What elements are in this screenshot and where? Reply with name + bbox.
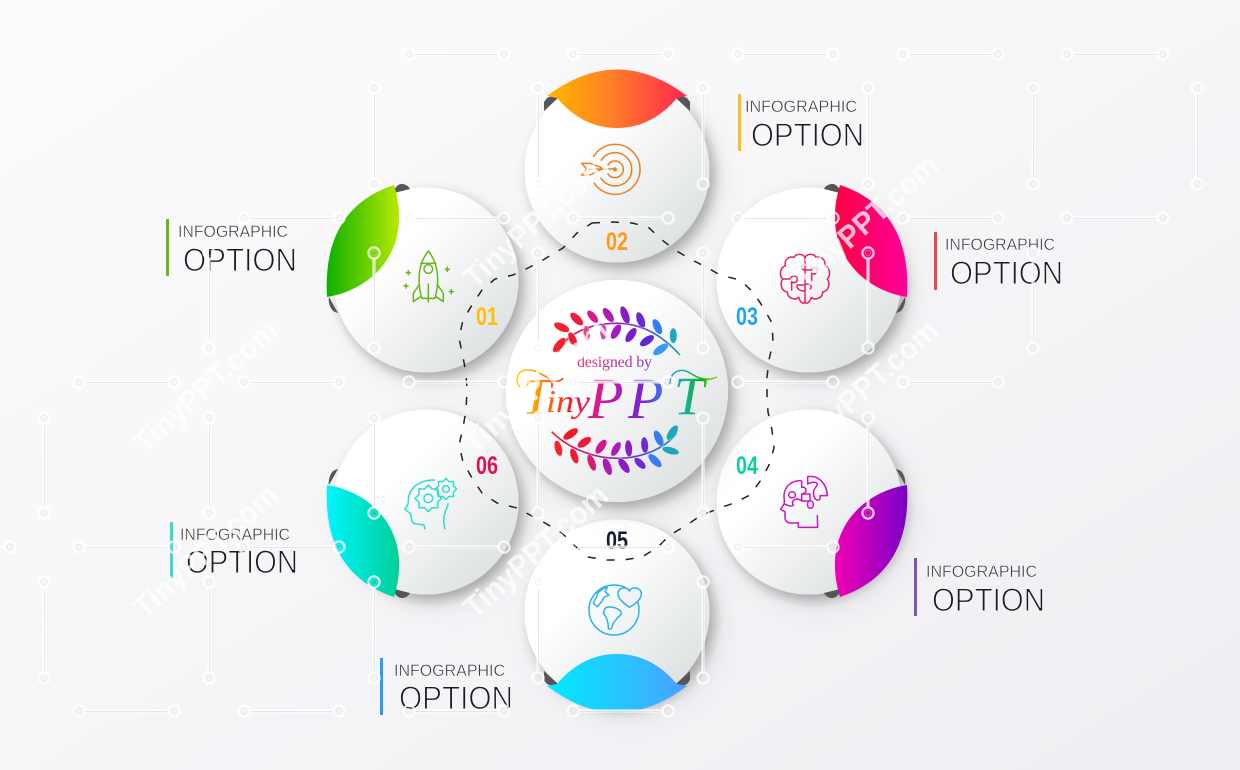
- number 06: 06: [476, 452, 498, 480]
- icon: rocket: [403, 251, 454, 302]
- icon: puzzle head: [781, 476, 827, 527]
- number 04: 04: [736, 452, 758, 480]
- disc 01: [327, 184, 518, 372]
- watermarks: TinyPPT.com: [126, 477, 285, 625]
- watermarks: TinyPPT.com: [456, 312, 615, 460]
- label 03: OPTION: [950, 255, 1063, 291]
- number 01: 01: [476, 303, 498, 331]
- label 04: OPTION: [932, 582, 1045, 618]
- logo upper wreath: [550, 305, 680, 358]
- label 02: INFOGRAPHIC: [745, 97, 857, 116]
- logo text: designed by: designed by: [577, 354, 652, 371]
- label 05: INFOGRAPHIC: [394, 661, 505, 680]
- disc 02: [524, 70, 710, 262]
- watermarks: TinyPPT.com: [456, 147, 615, 295]
- label 01: OPTION: [183, 242, 297, 278]
- watermarks: TinyPPT.com: [786, 147, 945, 295]
- label 03: INFOGRAPHIC: [945, 235, 1055, 254]
- disc 05: [524, 520, 710, 712]
- label 01: INFOGRAPHIC: [178, 222, 288, 241]
- logo lower wreath: [552, 423, 681, 476]
- logo text: TinyPPT: P: [627, 366, 663, 431]
- label 01: [166, 219, 297, 278]
- logo text: TinyPPT: P: [587, 366, 623, 431]
- centre disc: [506, 280, 728, 502]
- icon: brain: [780, 254, 830, 303]
- label 02: [738, 94, 864, 153]
- watermarks: TinyPPT.com: [456, 477, 615, 625]
- label 06: OPTION: [186, 544, 298, 580]
- label 04: INFOGRAPHIC: [926, 562, 1037, 581]
- dashed connector: [459, 222, 774, 560]
- label 04: [914, 558, 1045, 618]
- logo swashes: [517, 370, 717, 387]
- logo text: TinyPPT: T: [674, 366, 708, 426]
- number 02: 02: [606, 228, 628, 256]
- label 06: INFOGRAPHIC: [180, 525, 290, 544]
- disc 04: [716, 410, 907, 598]
- watermarks: TinyPPT.com: [786, 312, 945, 460]
- logo: designed by TinyPPT: [517, 305, 717, 476]
- label 03: [934, 232, 1063, 291]
- icon: head with gears: [405, 478, 457, 529]
- number 05: 05: [606, 527, 628, 555]
- disc 06: [327, 410, 518, 598]
- disc 03: [716, 184, 907, 372]
- label 06: [170, 522, 298, 580]
- icon: target: [582, 144, 640, 194]
- label 05: [380, 658, 513, 716]
- logo text: TinyPPT: iny: [546, 383, 591, 419]
- icon: earth with heart: [589, 585, 641, 635]
- watermarks: [126, 147, 945, 625]
- label 05: OPTION: [399, 680, 513, 716]
- logo text: TinyPPT: T: [522, 369, 554, 426]
- label 02: OPTION: [751, 117, 864, 153]
- number 03: 03: [736, 303, 758, 331]
- watermarks: TinyPPT.com: [126, 312, 285, 460]
